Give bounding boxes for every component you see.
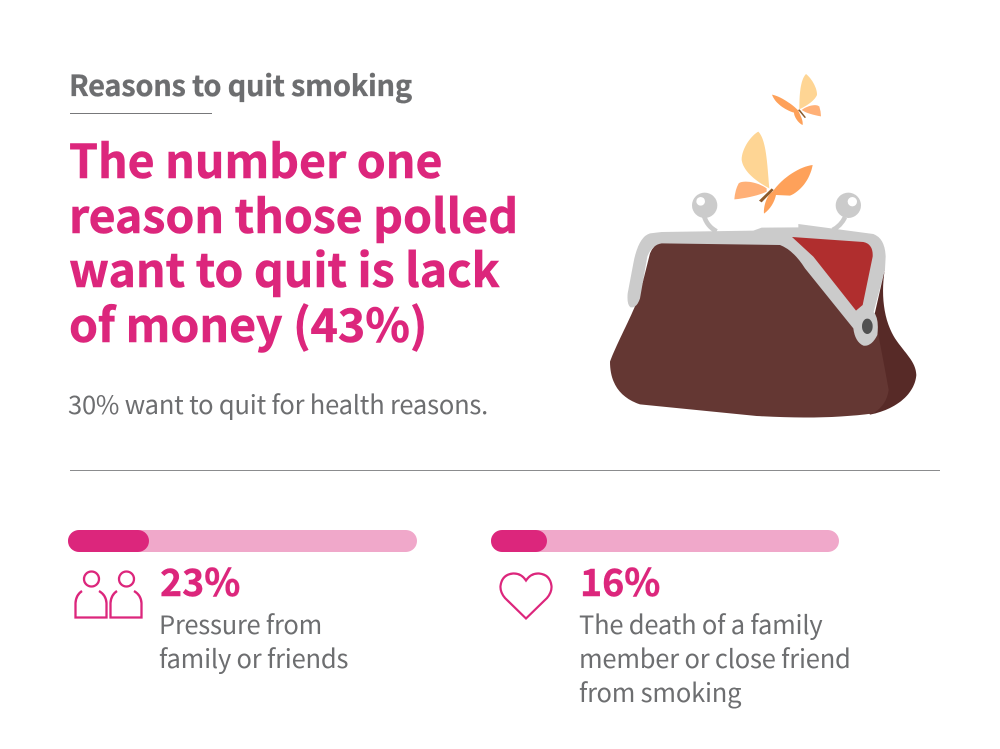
description: The death of a family <box>579 605 822 642</box>
section divider <box>70 470 940 471</box>
progress bar 16% <box>491 530 839 552</box>
description: family or friends <box>159 639 348 676</box>
headline: reason those polled <box>69 180 518 246</box>
panel: death of a family member <box>491 530 851 710</box>
small butterfly <box>772 74 821 125</box>
description: Pressure from <box>159 605 322 642</box>
divider <box>70 113 212 114</box>
illustration: purse with butterflies <box>610 74 916 418</box>
headline: want to quit is lack <box>69 234 500 301</box>
description <box>579 605 851 710</box>
description: member or close friend <box>579 639 851 676</box>
purse side panel <box>857 268 916 415</box>
large butterfly <box>734 132 813 214</box>
stat: 23%: 23% <box>160 552 240 607</box>
description: from smoking <box>579 673 741 710</box>
stat: 16%: 16% <box>580 552 660 607</box>
headline: The number one <box>69 125 442 192</box>
panel: pressure from family or friends <box>68 530 417 676</box>
purse body <box>610 242 889 418</box>
progress bar 23% <box>68 530 417 552</box>
subheading: health reasons: 30% want to quit for health reasons. <box>68 385 488 422</box>
page label: Reasons to quit smoking <box>69 63 412 105</box>
description <box>159 605 348 676</box>
purse lining <box>790 236 873 312</box>
headline: of money (43%) <box>69 288 428 356</box>
icon: two people <box>74 570 143 619</box>
icon: heart <box>499 572 553 620</box>
purse clasp <box>627 193 886 346</box>
headline <box>69 125 518 356</box>
